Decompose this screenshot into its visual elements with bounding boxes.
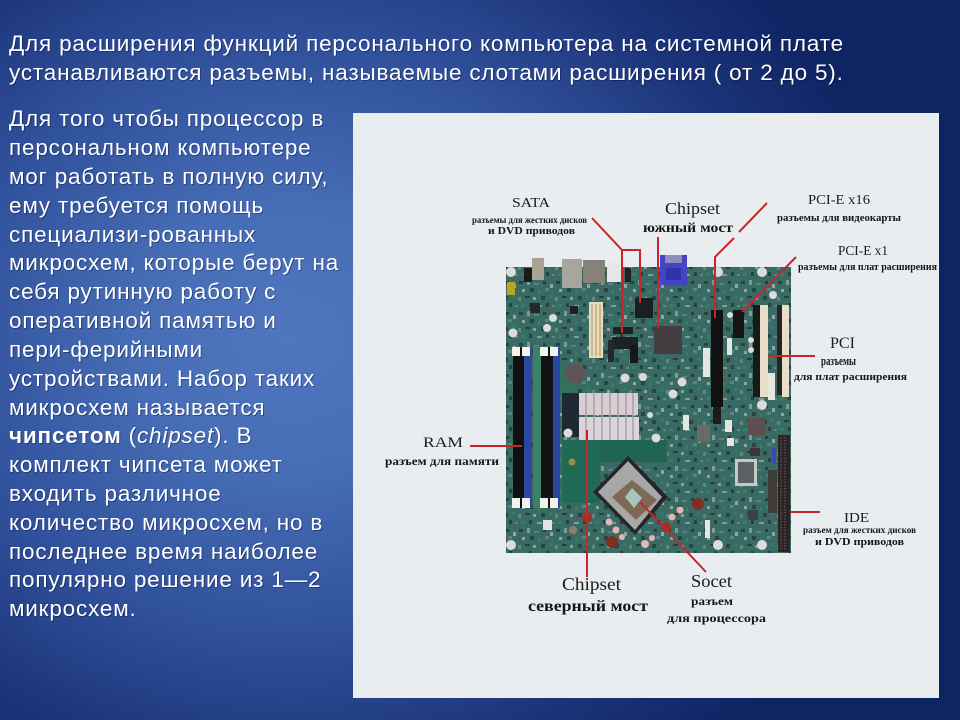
IDE connectors xyxy=(768,435,790,552)
label: socket: для процессора xyxy=(667,611,766,625)
label: PCI-E x16: PCI-E x16 xyxy=(808,193,870,208)
label: PCI-E x16: разъемы для видеокарты xyxy=(777,212,901,224)
label: PCI-E x1: разъемы для плат расширения xyxy=(798,262,938,273)
label: SATA: разъемы для жестких дисков xyxy=(472,215,587,225)
rear ports xyxy=(507,255,687,295)
body text: chipset description: устройствами. Набор таких xyxy=(9,366,315,391)
body text: chipset description: комплект чипсета может xyxy=(9,452,283,477)
label: PCI xyxy=(794,335,907,383)
label: IDE: и DVD приводов xyxy=(815,536,904,548)
SATA headers and nearby chips xyxy=(608,298,653,363)
body text: chipset description: специализи-рованных xyxy=(9,222,256,247)
body text: chipset description xyxy=(9,106,340,622)
label: socket: Socet xyxy=(691,571,732,591)
ATX power connector xyxy=(589,302,603,358)
arrow: socket xyxy=(640,502,706,572)
arrow: IDE xyxy=(790,511,820,513)
CPU socket xyxy=(593,456,668,535)
body text: chipset description: себя рутинную работу с xyxy=(9,279,276,304)
body text: chipset description: пери-ферийными xyxy=(9,337,203,362)
body text: chipset description: микросхем, которые берут на xyxy=(9,250,339,275)
PCI-E x1 slot xyxy=(733,310,744,338)
label: RAM xyxy=(385,435,499,468)
motherboard xyxy=(506,255,791,553)
arrow: SATA xyxy=(592,218,640,333)
label: PCI: разъемы xyxy=(821,353,856,368)
capacitors and mounting holes xyxy=(506,267,777,550)
body text: chipset description: популярно решение из 1—2 xyxy=(9,567,321,592)
label: PCI-E x1 xyxy=(798,244,938,273)
label: socket: разъем xyxy=(691,594,733,608)
body text: chipset description: Для того чтобы процессор в xyxy=(9,106,324,131)
label: PCI-E x16 xyxy=(777,193,901,224)
label: south bridge xyxy=(643,199,733,236)
label: RAM: RAM xyxy=(423,435,463,451)
heading: expansion slots xyxy=(9,31,844,86)
body text: chipset description: персональном компьютере xyxy=(9,135,312,160)
label: south bridge: южный мост xyxy=(643,221,733,236)
RAM slots xyxy=(512,347,560,508)
label: socket xyxy=(667,571,766,625)
body text: chipset description: оперативной памятью и xyxy=(9,308,277,333)
north bridge heatsink xyxy=(562,393,639,440)
label: PCI: для плат расширения xyxy=(794,371,907,383)
body text: chipset description: микросхем называется xyxy=(9,395,265,420)
label: SATA: и DVD приводов xyxy=(488,225,575,237)
label: north bridge: Chipset xyxy=(562,574,621,594)
label: IDE xyxy=(803,511,916,548)
arrow: PCI-E x16 xyxy=(715,203,767,318)
body text: chipset description: чипсетом (chipset). В xyxy=(9,423,252,448)
heading: expansion slots: устанавливаются разъемы, называемые слотами расширения ( от 2 до 5). xyxy=(9,60,844,85)
ICs xyxy=(530,303,776,530)
south bridge chip xyxy=(654,326,682,354)
PCI-E x16 slot xyxy=(711,310,723,424)
label: north bridge xyxy=(528,574,648,615)
label: PCI-E x1: PCI-E x1 xyxy=(838,244,888,259)
arrow: RAM xyxy=(470,445,522,447)
arrow: PCI-E x1 xyxy=(742,257,796,312)
PCI slots xyxy=(753,305,789,400)
white strip connectors xyxy=(683,338,734,538)
label: SATA xyxy=(472,196,587,237)
label: PCI: PCI xyxy=(830,335,855,352)
panel background xyxy=(353,113,939,698)
arrow: north bridge xyxy=(586,430,588,577)
body text: chipset description: последнее время наиболее xyxy=(9,539,318,564)
heading: expansion slots: Для расширения функций персонального компьютера на системной плате xyxy=(9,31,844,56)
label: IDE: IDE xyxy=(844,511,869,526)
label: north bridge: северный мост xyxy=(528,598,648,615)
label: SATA: SATA xyxy=(512,196,551,211)
red pointer lines xyxy=(470,203,820,577)
label: south bridge: Chipset xyxy=(665,199,720,218)
body text: chipset description: ему требуется помощь xyxy=(9,193,264,218)
body text: chipset description: мог работать в полную силу, xyxy=(9,164,328,189)
arrow: south bridge xyxy=(657,237,659,328)
arrow: PCI xyxy=(768,355,815,357)
body text: chipset description: входить различное xyxy=(9,481,222,506)
label: IDE: разъем для жестких дисков xyxy=(803,525,916,535)
body text: chipset description: количество микросхем, но в xyxy=(9,510,323,535)
plain green PCB area xyxy=(533,347,667,508)
label: RAM: разъем для памяти xyxy=(385,454,499,468)
body text: chipset description: микросхем. xyxy=(9,596,137,621)
